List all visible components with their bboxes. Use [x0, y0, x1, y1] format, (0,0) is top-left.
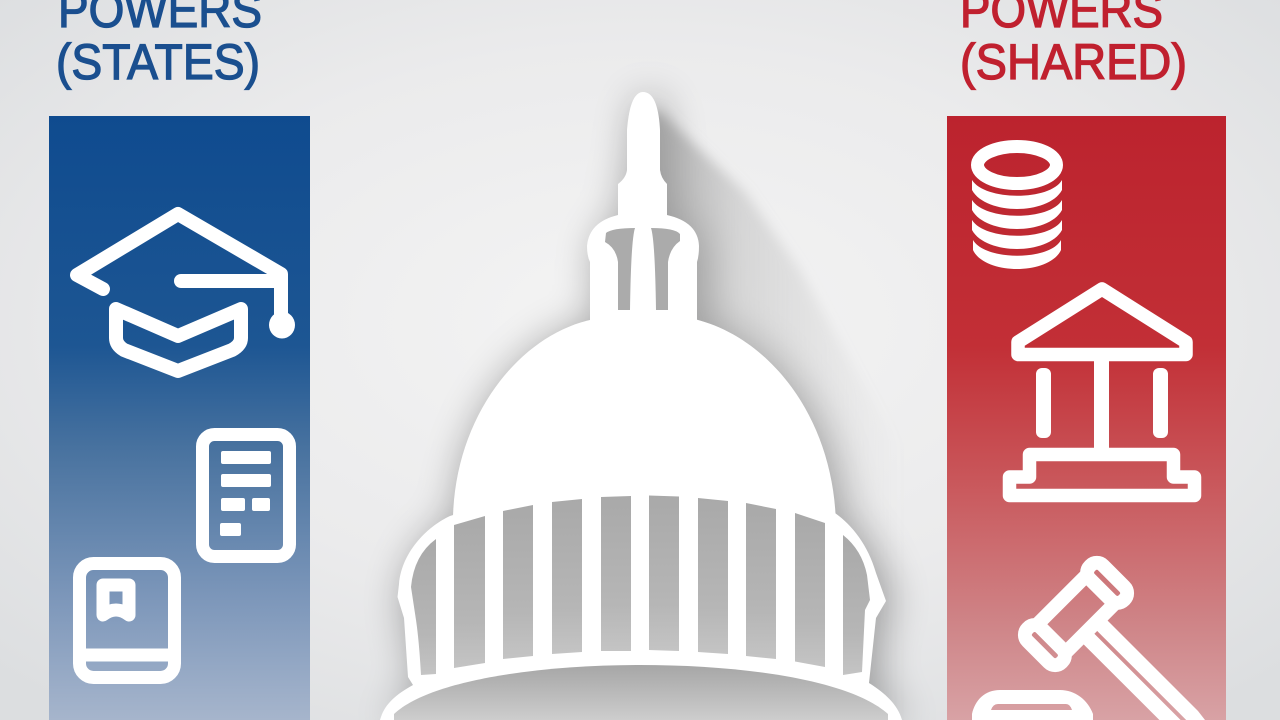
icon: book — [80, 564, 174, 678]
spire and cupola — [587, 92, 699, 322]
icon: coin stack — [972, 146, 1062, 269]
shadow: capitol dome — [386, 96, 930, 720]
heading: powers (shared): (SHARED) — [960, 34, 1187, 90]
heading: powers (states) — [56, 0, 262, 90]
heading: powers (states): (STATES) — [56, 34, 260, 90]
dome — [453, 318, 836, 530]
icon: gavel — [972, 559, 1205, 720]
panel: shared — [947, 116, 1226, 720]
colonnade and base ring — [380, 492, 902, 720]
icon: graduation cap — [77, 214, 295, 371]
colonnade windows — [411, 496, 870, 675]
heading: powers (shared) — [960, 0, 1187, 90]
illustration: capitol dome — [380, 92, 902, 720]
icon: courthouse — [1010, 289, 1194, 496]
icon: document — [202, 434, 290, 556]
panel: states — [49, 116, 310, 720]
base ring interior — [394, 665, 888, 720]
cupola windows — [605, 228, 680, 310]
